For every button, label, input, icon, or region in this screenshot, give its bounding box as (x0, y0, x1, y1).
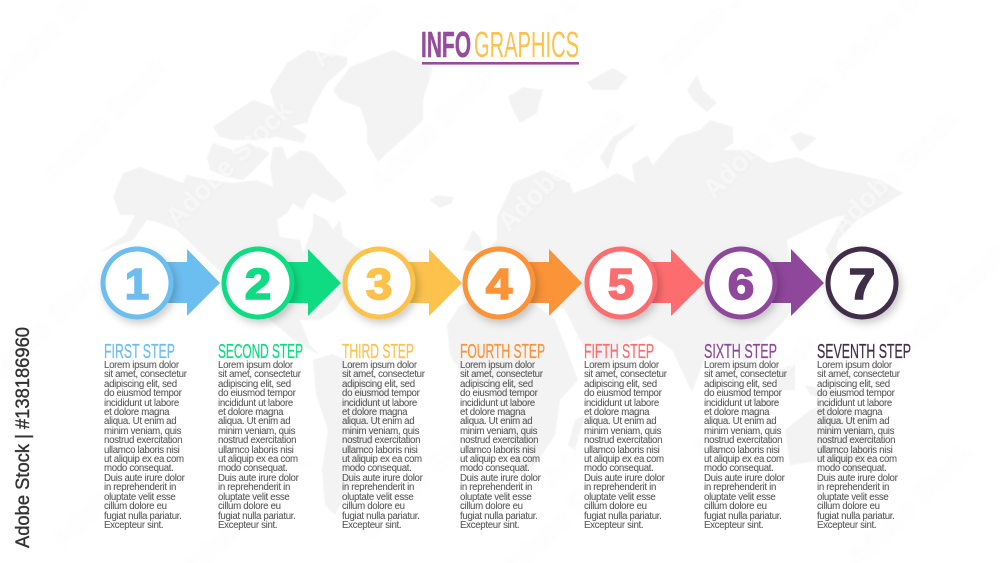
stock watermarks: Adobe Stock (363, 56, 501, 195)
stock watermarks: Adobe Stock (35, 49, 173, 188)
step 5 marker (584, 246, 704, 320)
title (421, 24, 579, 65)
step headings: THIRD STEP (342, 340, 414, 363)
step 7 marker: 7 (849, 260, 875, 309)
first step text: Lorem ipsum dolor sit amet, consectetur adipiscing elit, sed do eiusmod tempor incididunt ut labore et dolore magna aliqua. Ut enim ad minim veniam, quis nostrud exercitation ullamco laboris nisi ut aliquip ex ea com modo consequat. Duis aute irure dolor in reprehenderit in oluptate velit esse cillum dolore eu fugiat nulla pariatur. Excepteur sint. (104, 360, 187, 531)
step 2 marker (222, 246, 341, 320)
sixth step text: Lorem ipsum dolor sit amet, consectetur adipiscing elit, sed do eiusmod tempor incididunt ut labore et dolore magna aliqua. Ut enim ad minim veniam, quis nostrud exercitation ullamco laboris nisi ut aliquip ex ea com modo consequat. Duis aute irure dolor in reprehenderit in oluptate velit esse cillum dolore eu fugiat nulla pariatur. Excepteur sint. (704, 360, 787, 531)
stock watermarks: Adobe Stock (825, 102, 963, 241)
step 2 marker: 2 (245, 260, 271, 309)
step headings: SEVENTH STEP (817, 340, 911, 363)
stock watermarks: Adobe Stock (697, 66, 835, 205)
step 1 marker: 1 (125, 260, 149, 309)
step 3 marker: 3 (366, 260, 392, 309)
title: GRAPHICS (474, 24, 579, 65)
stock watermarks: Adobe Stock (45, 414, 183, 553)
step 7 marker (826, 246, 898, 320)
step 3 marker (342, 246, 462, 320)
title: INFO (421, 24, 471, 65)
stock watermarks: Adobe Stock (160, 94, 298, 233)
step headings: SIXTH STEP (704, 340, 777, 363)
second step text: Lorem ipsum dolor sit amet, consectetur adipiscing elit, sed do eiusmod tempor incididunt ut labore et dolore magna aliqua. Ut enim ad minim veniam, quis nostrud exercitation ullamco laboris nisi ut aliquip ex ea com modo consequat. Duis aute irure dolor in reprehenderit in oluptate velit esse cillum dolore eu fugiat nulla pariatur. Excepteur sint. (218, 360, 301, 531)
third step text: Lorem ipsum dolor sit amet, consectetur adipiscing elit, sed do eiusmod tempor incididunt ut labore et dolore magna aliqua. Ut enim ad minim veniam, quis nostrud exercitation ullamco laboris nisi ut aliquip ex ea com modo consequat. Duis aute irure dolor in reprehenderit in oluptate velit esse cillum dolore eu fugiat nulla pariatur. Excepteur sint. (342, 360, 425, 531)
stock watermarks: Adobe Stock (355, 404, 493, 543)
stock watermarks: Adobe Stock (492, 99, 630, 238)
step 1 marker (100, 246, 220, 320)
step 5 marker: 5 (608, 260, 634, 309)
stock credit text: Adobe Stock | #138186960 (13, 327, 34, 548)
seventh step text: Lorem ipsum dolor sit amet, consectetur adipiscing elit, sed do eiusmod tempor incididunt ut labore et dolore magna aliqua. Ut enim ad minim veniam, quis nostrud exercitation ullamco laboris nisi ut aliquip ex ea com modo consequat. Duis aute irure dolor in reprehenderit in oluptate velit esse cillum dolore eu fugiat nulla pariatur. Excepteur sint. (817, 360, 900, 531)
stock watermarks: Adobe Stock (685, 324, 823, 463)
step headings: FIFTH STEP (584, 340, 654, 363)
step 6 marker (704, 246, 824, 320)
step 6 marker: 6 (728, 260, 754, 309)
step headings: FOURTH STEP (460, 340, 545, 363)
step 4 marker: 4 (486, 260, 513, 309)
step headings: SECOND STEP (218, 340, 303, 363)
stock watermarks: Adobe Stock (535, 354, 673, 493)
step 4 marker (462, 246, 582, 320)
fourth step text: Lorem ipsum dolor sit amet, consectetur adipiscing elit, sed do eiusmod tempor incididunt ut labore et dolore magna aliqua. Ut enim ad minim veniam, quis nostrud exercitation ullamco laboris nisi ut aliquip ex ea com modo consequat. Duis aute irure dolor in reprehenderit in oluptate velit esse cillum dolore eu fugiat nulla pariatur. Excepteur sint. (460, 360, 543, 531)
fifth step text: Lorem ipsum dolor sit amet, consectetur adipiscing elit, sed do eiusmod tempor incididunt ut labore et dolore magna aliqua. Ut enim ad minim veniam, quis nostrud exercitation ullamco laboris nisi ut aliquip ex ea com modo consequat. Duis aute irure dolor in reprehenderit in oluptate velit esse cillum dolore eu fugiat nulla pariatur. Excepteur sint. (584, 360, 667, 531)
step headings: FIRST STEP (104, 340, 175, 363)
